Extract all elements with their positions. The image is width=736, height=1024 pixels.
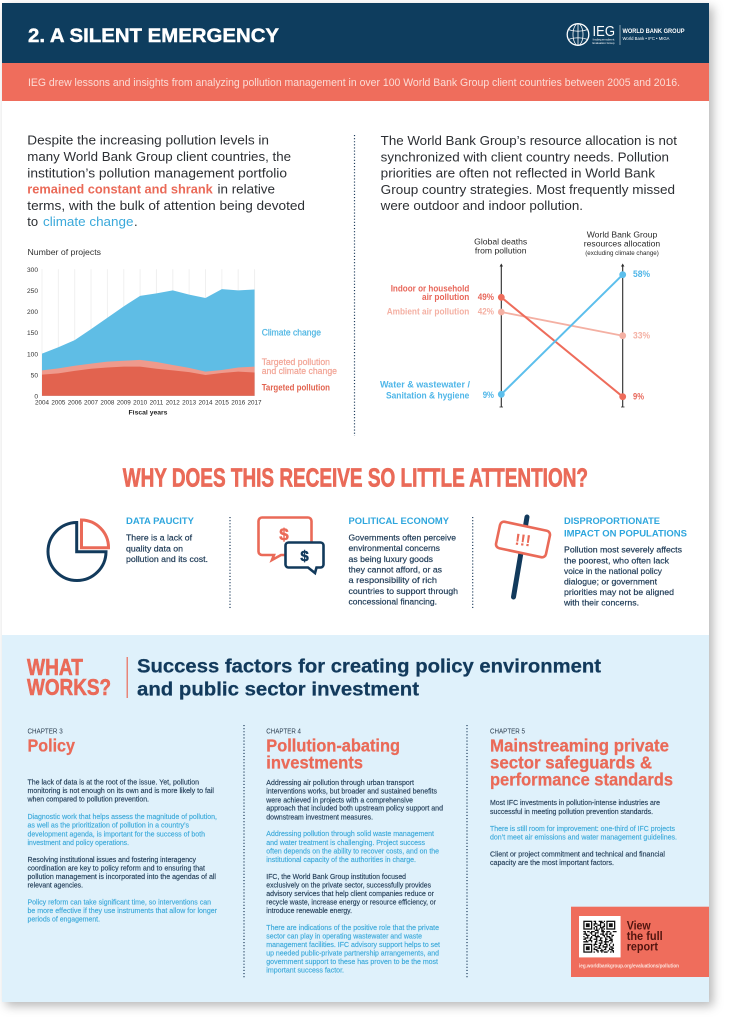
panel: disproportionate impact: IMPACT ON POPULATIONS: [564, 528, 688, 540]
area chart: number of projects: 250: [27, 288, 38, 295]
header band: [2, 3, 709, 63]
column: chapter 3 policy: as well as the prioritization of pollution in a country’s: [28, 821, 189, 830]
column: chapter 3 policy: coordination are key to policy reform and to ensuring that: [28, 864, 205, 872]
callout: view the full report: [571, 907, 709, 977]
icon: speech bubbles with dollars: [258, 518, 324, 573]
column: chapter 4 pollution-abating investments: There are indications of the positive role that the private: [266, 923, 439, 932]
panel: disproportionate impact: [495, 516, 688, 608]
column: chapter 5 private sector safeguards: There is still room for improvement: one-third of IFC projects: [490, 824, 675, 833]
column: chapter 5 private sector safeguards: don’t meet air emissions and water management guidelines.: [490, 833, 677, 842]
text block: portfolio findings: climate change: [43, 214, 134, 229]
panel: political economy: concessional financing.: [348, 596, 437, 606]
section background: what works: [2, 635, 709, 1002]
slope chart: deaths versus resources: World Bank Group: [587, 230, 657, 240]
text block: portfolio findings: Despite the increasing pollution levels in: [27, 133, 269, 148]
area chart: number of projects: 50: [31, 373, 38, 380]
text block: portfolio findings: institution’s pollution management portfolio: [27, 165, 287, 180]
column: chapter 4 pollution-abating investments: [265, 727, 443, 974]
column: chapter 3 policy: when compared to pollution prevention.: [27, 795, 149, 804]
text block: portfolio findings: many World Bank Group client countries, the: [27, 149, 291, 164]
area chart: number of projects: 2010: [133, 400, 148, 406]
heading: why so little attention: WHY DOES THIS RECEIVE SO LITTLE ATTENTION?: [123, 465, 588, 493]
logo: IEG World Bank Group: World Bank • IFC • MIGA: [622, 36, 670, 41]
column: chapter 4 pollution-abating investments: often depends on the ability to recover costs, and on the: [266, 846, 439, 856]
area chart: number of projects: 2008: [100, 400, 115, 406]
column: chapter 4 pollution-abating investments: introduce renewable energy.: [266, 906, 352, 915]
text block: resource allocation: Group country strategies. Most frequently missed: [381, 182, 675, 197]
panel: data paucity: pollution and its cost.: [126, 554, 208, 564]
area chart: number of projects: 2004: [35, 400, 49, 406]
area chart: number of projects: 2011: [150, 400, 164, 406]
panel: disproportionate impact: dialogue; or government: [564, 576, 658, 586]
text block: portfolio findings: to: [27, 214, 38, 229]
column: chapter 4 pollution-abating investments: were achieved in projects with a comprehensive: [265, 796, 413, 804]
slope chart: deaths versus resources: from pollution: [475, 245, 527, 255]
column: chapter 5 private sector safeguards: Client or project commitment and technical and financial: [490, 850, 665, 859]
column: chapter 3 policy: periods of engagement.: [28, 914, 100, 924]
area chart: number of projects: 2006: [68, 400, 82, 406]
column: chapter 4 pollution-abating investments: government support to these has proven to be the most: [266, 957, 438, 966]
slope chart: deaths versus resources: 9%: [483, 390, 494, 400]
column: chapter 4 pollution-abating investments: up needed public-private partnership arrangements, and: [266, 948, 439, 958]
column: chapter 5 private sector safeguards: successful in meeting pollution prevention standards.: [490, 807, 653, 816]
column: chapter 3 policy: monitoring is not enough on its own and is more likely to fail: [28, 786, 214, 795]
column: chapter 3 policy: investment and policy operations.: [28, 838, 129, 847]
logo: IEG World Bank Group: IEG: [592, 23, 615, 40]
panel: disproportionate impact: DISPROPORTIONATE: [564, 516, 661, 527]
chart legend: and climate change: [262, 366, 337, 376]
column: chapter 3 policy: development agenda, is important for the success of both: [28, 829, 205, 838]
column: chapter 5 private sector safeguards: sector safeguards &: [490, 752, 652, 772]
panel: data paucity: There is a lack of: [126, 533, 193, 543]
column: chapter 4 pollution-abating investments: IFC, the World Bank Group institution focused: [266, 872, 406, 881]
slope chart: deaths versus resources: 9%: [633, 392, 644, 402]
column: chapter 5 private sector safeguards: Mainstreaming private: [490, 736, 669, 756]
area chart: number of projects: [27, 247, 337, 416]
area chart: number of projects: 0: [34, 394, 38, 400]
text block: resource allocation: synchronized with client country needs. Pollution: [381, 149, 669, 164]
column: chapter 4 pollution-abating investments: recycle waste, increase energy or resource efficiency, or: [266, 898, 436, 906]
column: chapter 4 pollution-abating investments: institutional capacity of the authorities in charge.: [266, 855, 416, 864]
slope chart: deaths versus resources: Indoor or household: [391, 283, 469, 293]
column: chapter 4 pollution-abating investments: Addressing air pollution through urban transport: [266, 778, 414, 787]
column: chapter 4 pollution-abating investments: CHAPTER 4: [266, 727, 302, 736]
text block: portfolio findings: remained constant and shrank: [27, 182, 214, 197]
icon: speech bubbles with dollars: $: [300, 548, 309, 565]
title: 2. A SILENT EMERGENCY: [28, 25, 279, 47]
panel: data paucity: quality data on: [126, 543, 183, 553]
chart legend: [262, 328, 337, 392]
text block: resource allocation: priorities are often not reflected in World Bank: [381, 166, 656, 181]
heading: what works: and public sector investment: [137, 678, 419, 700]
heading: what works: Success factors for creating policy environment: [137, 656, 601, 678]
column: chapter 4 pollution-abating investments: exclusively on the private sector, successfully provides: [266, 880, 431, 890]
text block: portfolio findings: in relative: [218, 182, 275, 197]
chart legend: Targeted pollution: [262, 357, 330, 367]
panel: disproportionate impact: with their concerns.: [563, 598, 639, 608]
slope chart: deaths versus resources: 33%: [633, 331, 650, 341]
column: chapter 4 pollution-abating investments: downstream investment measures.: [266, 812, 373, 822]
column: chapter 5 private sector safeguards: capacity are the most important factors.: [490, 858, 614, 867]
text block: resource allocation: [380, 133, 677, 213]
area chart: number of projects: 100: [27, 351, 38, 358]
text block: resource allocation: were outdoor and indoor pollution.: [380, 198, 583, 213]
area chart: number of projects: 300: [27, 267, 38, 274]
column: chapter 3 policy: The lack of data is at the root of the issue. Yet, pollution: [28, 778, 199, 786]
logo: IEG World Bank Group: WORLD BANK GROUP: [622, 29, 684, 35]
slope chart: deaths versus resources: 49%: [478, 292, 494, 302]
slope chart: deaths versus resources: 42%: [478, 307, 494, 317]
column: chapter 4 pollution-abating investments: approach that included both upstream policy support and: [266, 804, 443, 812]
area chart: number of projects: 150: [27, 330, 38, 337]
area chart: number of projects: 2016: [231, 400, 246, 406]
slope chart: deaths versus resources: air pollution: [422, 292, 469, 302]
logo: IEG World Bank Group: Evaluation Group: [592, 41, 615, 45]
panel: political economy: a responsibility of rich: [348, 575, 437, 585]
panel: data paucity: [48, 516, 208, 580]
area chart: number of projects: 2005: [51, 400, 66, 406]
text block: resource allocation: The World Bank Group’s resource allocation is not: [381, 133, 677, 148]
panel: disproportionate impact: priorities may not be aligned: [564, 587, 674, 597]
panel: political economy: countries to support through: [348, 586, 458, 596]
slope chart: deaths versus resources: Global deaths: [474, 236, 527, 246]
panel: political economy: as being luxury goods: [348, 554, 433, 564]
area chart: number of projects: 2017: [248, 400, 262, 406]
area chart: number of projects: 2013: [182, 400, 197, 406]
callout: view the full report: View: [627, 918, 651, 932]
area chart: number of projects: 2015: [215, 400, 229, 406]
column: chapter 4 pollution-abating investments: investments: [266, 752, 363, 772]
area chart: number of projects: 200: [27, 309, 38, 316]
column: chapter 3 policy: relevant agencies.: [28, 880, 83, 890]
slope chart: deaths versus resources: (excluding climate change): [585, 250, 659, 257]
intro banner: IEG drew lessons and insights from analyzing pollution management in over 100 World Bank Group client countries between 2005 and 2016.: [28, 77, 680, 89]
icon: protest sign: [495, 517, 551, 597]
chart legend: Climate change: [262, 328, 321, 338]
panel: political economy: environmental concerns: [348, 543, 440, 553]
heading: what works: WHAT: [27, 654, 84, 680]
callout: view the full report: ieg.worldbankgroup.org/evaluations/pollution: [579, 964, 679, 970]
area chart: number of projects: Fiscal years: [129, 410, 168, 416]
heading: what works: [27, 654, 601, 700]
column: chapter 4 pollution-abating investments: and water treatment is challenging. Project success: [266, 838, 425, 847]
column: chapter 5 private sector safeguards: Most IFC investments in pollution-intense industries are: [490, 798, 660, 807]
icon: QR code: [583, 921, 617, 952]
heading: what works: WORKS?: [27, 674, 111, 700]
area chart: number of projects: 2012: [166, 400, 180, 406]
text block: portfolio findings: terms, with the bulk of attention being devoted: [27, 198, 305, 213]
area chart: number of projects: 2009: [117, 400, 131, 406]
column: chapter 5 private sector safeguards: performance standards: [490, 770, 673, 790]
column: chapter 5 private sector safeguards: CHAPTER 5: [490, 727, 525, 736]
column: chapter 4 pollution-abating investments: Pollution-abating: [266, 736, 400, 756]
column: chapter 4 pollution-abating investments: important success factor.: [266, 966, 344, 974]
column: chapter 4 pollution-abating investments: interventions works, but broader and sustained benefits: [266, 786, 437, 796]
text block: portfolio findings: [27, 133, 305, 229]
column: chapter 3 policy: Policy reform can take significant time, so interventions can: [28, 898, 211, 906]
column: chapter 3 policy: CHAPTER 3: [28, 727, 63, 736]
column: chapter 4 pollution-abating investments: sector can play in operating wastewater and waste: [266, 932, 422, 940]
column: chapter 4 pollution-abating investments: Addressing pollution through solid waste management: [266, 829, 434, 838]
panel: political economy: Governments often perceive: [348, 533, 456, 543]
slope chart: deaths versus resources: resources allocation: [584, 239, 660, 249]
slope chart: deaths versus resources: [380, 230, 660, 407]
column: chapter 3 policy: pollution management is incorporated into the agendas of all: [28, 872, 216, 881]
logo: IEG World Bank Group: Independent: [592, 38, 615, 42]
logo: IEG World Bank Group: [567, 23, 684, 45]
column: chapter 3 policy: be more effective if they use instruments that allow for longer: [28, 906, 218, 915]
area chart: number of projects: Number of projects: [28, 247, 101, 257]
area chart: number of projects: 2014: [198, 400, 213, 406]
panel: political economy: they cannot afford, or as: [348, 565, 442, 575]
panel: political economy: POLITICAL ECONOMY: [348, 516, 450, 527]
slope chart: deaths versus resources: Ambient air pollution: [387, 307, 469, 317]
chart legend: Targeted pollution: [262, 382, 330, 392]
column: chapter 3 policy: Resolving institutional issues and fostering interagency: [28, 855, 196, 864]
column: chapter 3 policy: Diagnostic work that helps assess the magnitude of pollution,: [28, 812, 217, 821]
panel: disproportionate impact: the poorest, who often lack: [564, 556, 670, 566]
callout: view the full report: report: [627, 940, 658, 954]
column: chapter 3 policy: Policy: [28, 736, 75, 756]
text block: portfolio findings: .: [134, 214, 138, 229]
column: chapter 3 policy: [27, 727, 218, 924]
panel: data paucity: DATA PAUCITY: [126, 516, 195, 527]
column: chapter 4 pollution-abating investments: advisory services that help client companies reduce or: [266, 889, 435, 898]
intro banner: [2, 63, 709, 101]
area chart: number of projects: 2007: [84, 400, 99, 406]
column: chapter 5 private sector safeguards: [490, 727, 677, 867]
column: chapter 4 pollution-abating investments: management facilities. IFC advisory support helps to set: [266, 940, 440, 949]
slope chart: deaths versus resources: Water & wastewater /: [380, 380, 471, 390]
icon: protest sign: !!!: [514, 531, 532, 551]
slope chart: deaths versus resources: Sanitation & hygiene: [386, 390, 469, 400]
slope chart: deaths versus resources: 58%: [633, 269, 650, 279]
callout: view the full report: the full: [627, 929, 663, 943]
panel: political economy: [258, 516, 458, 606]
icon: speech bubbles with dollars: $: [279, 525, 289, 544]
panel: disproportionate impact: voice in the national policy: [564, 566, 663, 576]
panel: disproportionate impact: Pollution most severely affects: [564, 545, 682, 555]
icon: pie chart: [48, 520, 109, 580]
